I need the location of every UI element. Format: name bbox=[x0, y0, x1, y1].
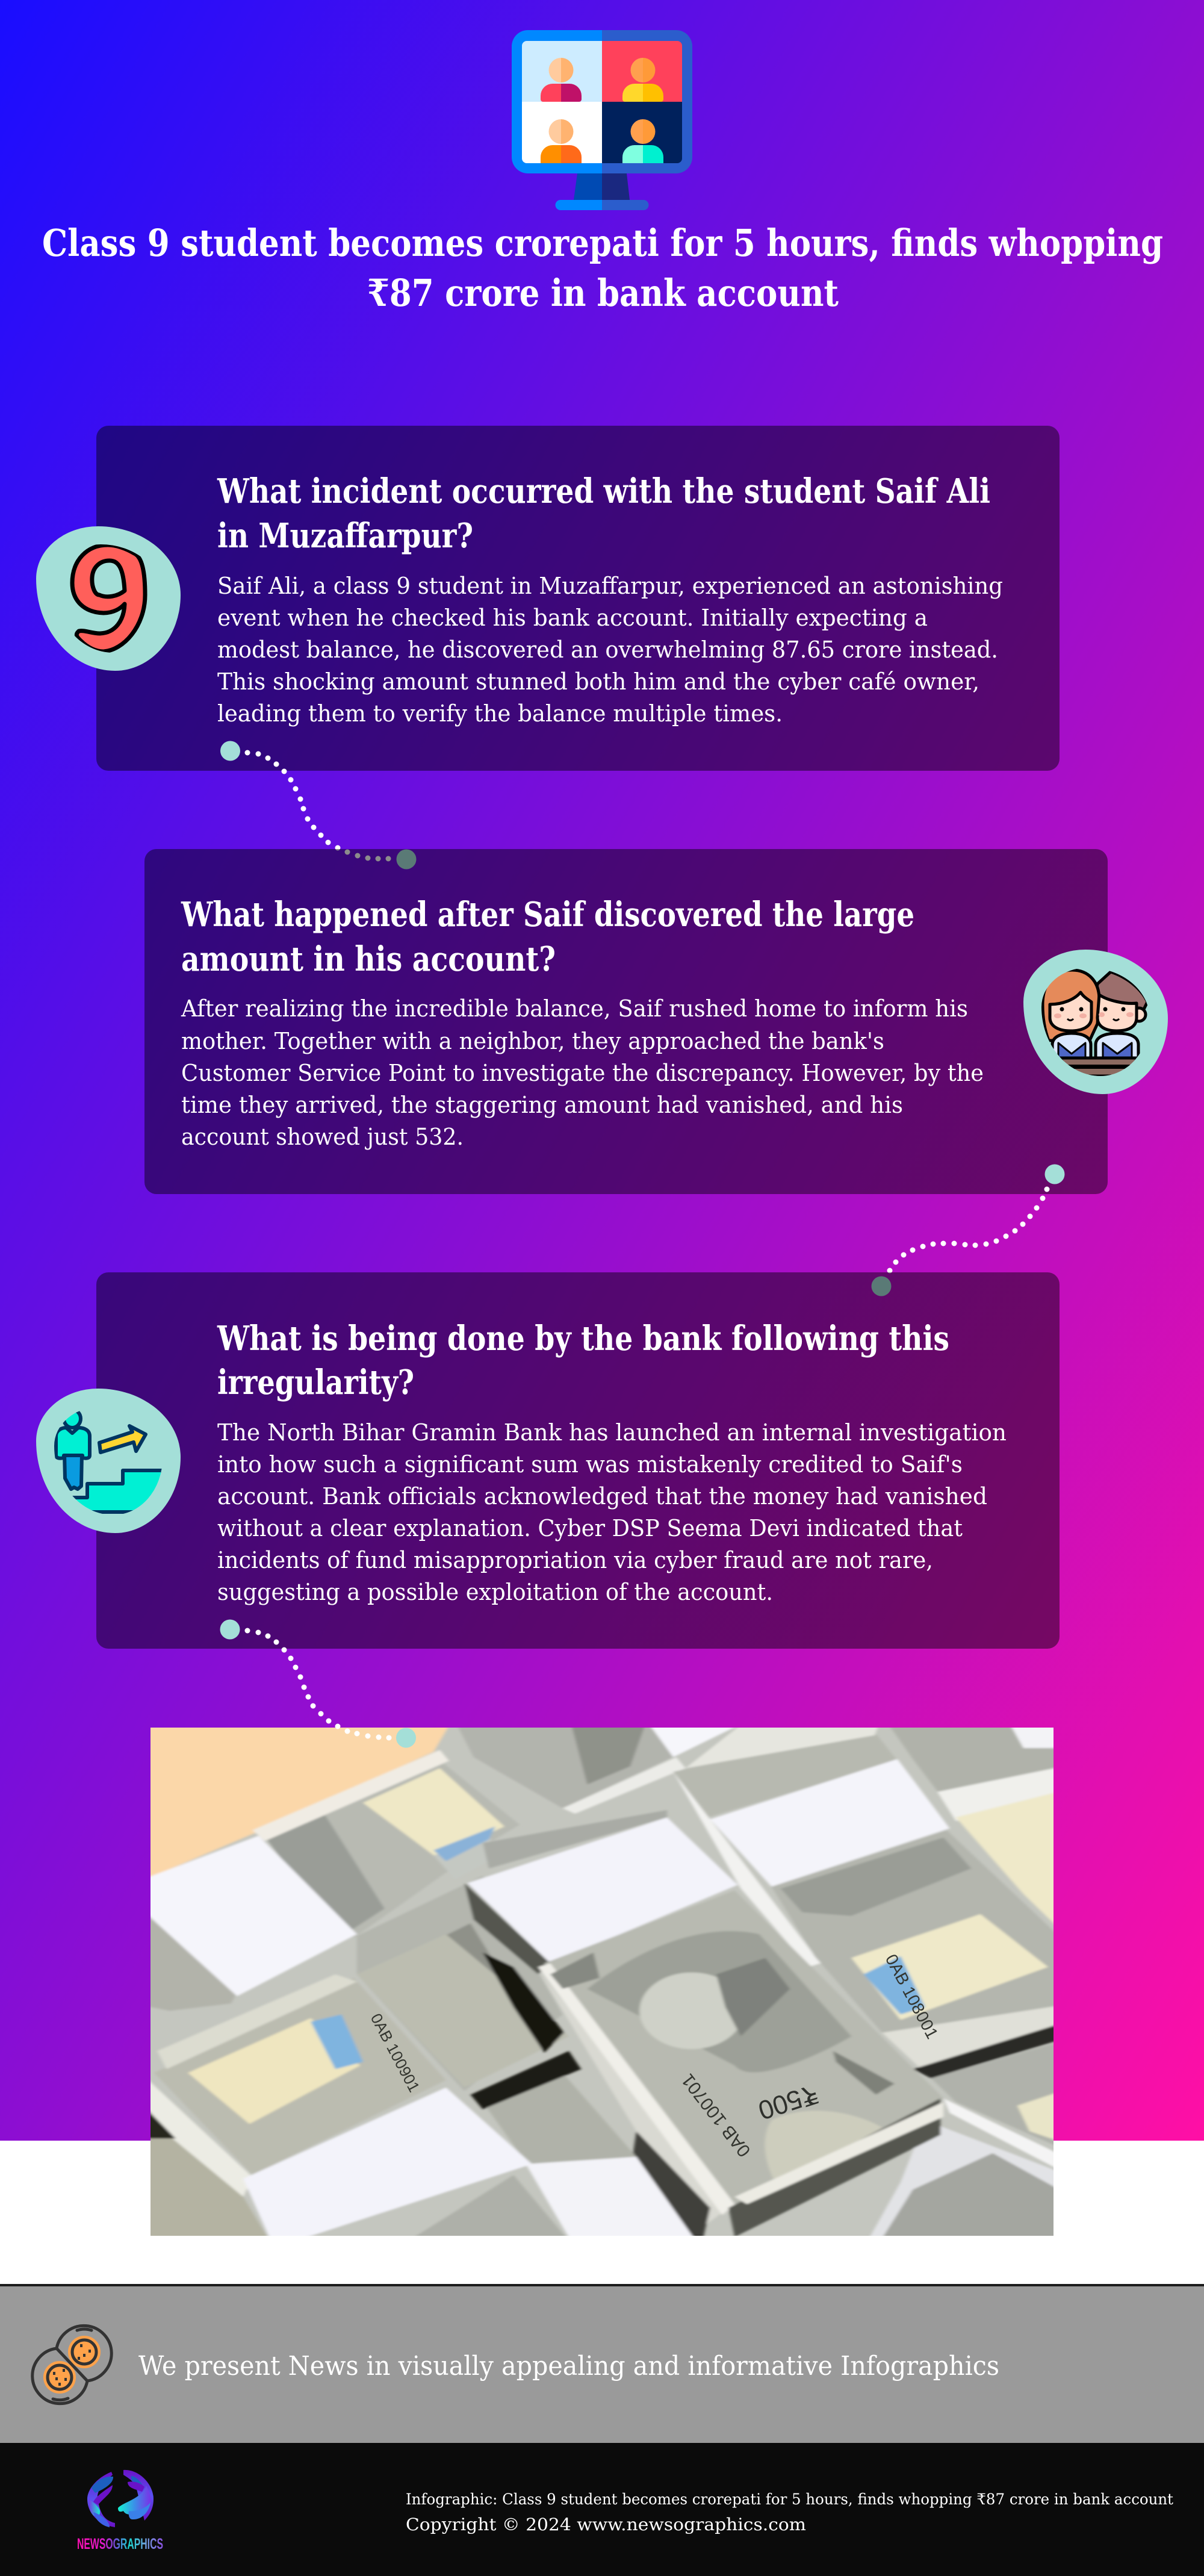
panel: what the bank is doing bbox=[36, 1272, 1060, 1649]
arrow: dotted connector one bbox=[220, 741, 417, 870]
text block: incident description: This shocking amount stunned both him and the cyber café owner, bbox=[217, 668, 979, 695]
photo: bundles of 500 rupee notes: ₹500 bbox=[754, 2078, 822, 2125]
heading: what the bank is doing: What is being done by the bank following this bbox=[217, 1319, 949, 1358]
heading: what happened after: What happened after Saif discovered the large bbox=[181, 895, 914, 935]
panel: black footer bbox=[0, 2443, 1204, 2576]
heading: what incident occurred: What incident occurred with the student Saif Ali bbox=[217, 471, 990, 511]
heading: what the bank is doing: irregularity? bbox=[217, 1363, 414, 1402]
heading: what happened after bbox=[181, 895, 914, 979]
heading: what incident occurred bbox=[217, 471, 990, 556]
photo: bundles of 500 rupee notes: 0AB 108001 bbox=[882, 1951, 942, 2042]
text block: aftermath description: account showed just 532. bbox=[181, 1124, 464, 1150]
footer credit text: Infographic: Class 9 student becomes crorepati for 5 hours, finds whopping ₹87 crore in bank account bbox=[406, 2490, 1173, 2508]
panel: what incident occurred bbox=[36, 426, 1060, 771]
title bbox=[42, 221, 1163, 315]
icon: two students in blob bbox=[1023, 950, 1168, 1094]
text block: bank investigation description: account. Bank officials acknowledged that the money had vanished bbox=[217, 1483, 987, 1510]
text block: aftermath description bbox=[181, 995, 984, 1150]
text block: aftermath description: After realizing the incredible balance, Saif rushed home to inform his bbox=[181, 995, 968, 1022]
icon: two plates bbox=[33, 2326, 111, 2404]
text block: aftermath description: time they arrived, the staggering amount had vanished, and his bbox=[181, 1092, 903, 1118]
logo: newsographics bbox=[77, 2470, 163, 2553]
footer credit text bbox=[406, 2490, 1173, 2534]
photo: bundles of 500 rupee notes: 0AB 100701 bbox=[678, 2070, 755, 2161]
arrow: dotted connector three bbox=[220, 1620, 416, 1747]
title: ₹87 crore in bank account bbox=[367, 271, 839, 315]
photo: bundles of 500 rupee notes: 0AB 100901 bbox=[367, 2011, 423, 2095]
text block: bank investigation description: without a clear explanation. Cyber DSP Seema Devi indicated that bbox=[217, 1515, 963, 1542]
heading: what happened after: amount in his account? bbox=[181, 939, 556, 979]
arrow: dotted connector two bbox=[872, 1165, 1064, 1296]
text block: bank investigation description: suggesting a possible exploitation of the account. bbox=[217, 1579, 773, 1605]
text block: bank investigation description bbox=[217, 1419, 1007, 1605]
text block: bank investigation description: into how such a significant sum was mistakenly credited to Saif's bbox=[217, 1451, 963, 1478]
text block: aftermath description: Customer Service Point to investigate the discrepancy. However, by the bbox=[181, 1060, 984, 1086]
text block: bank investigation description: incidents of fund misappropriation via cyber fraud are not rare, bbox=[217, 1547, 933, 1573]
text block: bank investigation description: The North Bihar Gramin Bank has launched an internal investigation bbox=[217, 1419, 1007, 1446]
text block: incident description: Saif Ali, a class 9 student in Muzaffarpur, experienced an astonishing bbox=[217, 573, 1003, 599]
photo: bundles of 500 rupee notes bbox=[132, 1715, 1073, 2248]
text block: incident description: modest balance, he discovered an overwhelming 87.65 crore instead. bbox=[217, 636, 998, 663]
text block: incident description: leading them to verify the balance multiple times. bbox=[217, 700, 783, 727]
panel: grey tagline band bbox=[0, 2284, 1204, 2443]
logo wordmark: NEWSOGRAPHICS bbox=[77, 2536, 163, 2553]
heading: what incident occurred: in Muzaffarpur? bbox=[217, 516, 473, 556]
text block: aftermath description: mother. Together with a neighbor, they approached the bank's bbox=[181, 1028, 884, 1054]
icon: number nine in blob bbox=[36, 526, 181, 671]
icon: video call monitor bbox=[512, 30, 692, 210]
panel: what happened after bbox=[144, 849, 1168, 1194]
text block: incident description: event when he checked his bank account. Initially expecting a bbox=[217, 605, 928, 631]
footer credit text: Copyright © 2024 www.newsographics.com bbox=[406, 2515, 806, 2534]
heading: what the bank is doing bbox=[217, 1319, 949, 1402]
icon: person with stairs and arrow in blob bbox=[36, 1389, 181, 1533]
text block: incident description bbox=[217, 573, 1003, 727]
tagline: We present News in visually appealing and informative Infographics bbox=[138, 2351, 999, 2382]
